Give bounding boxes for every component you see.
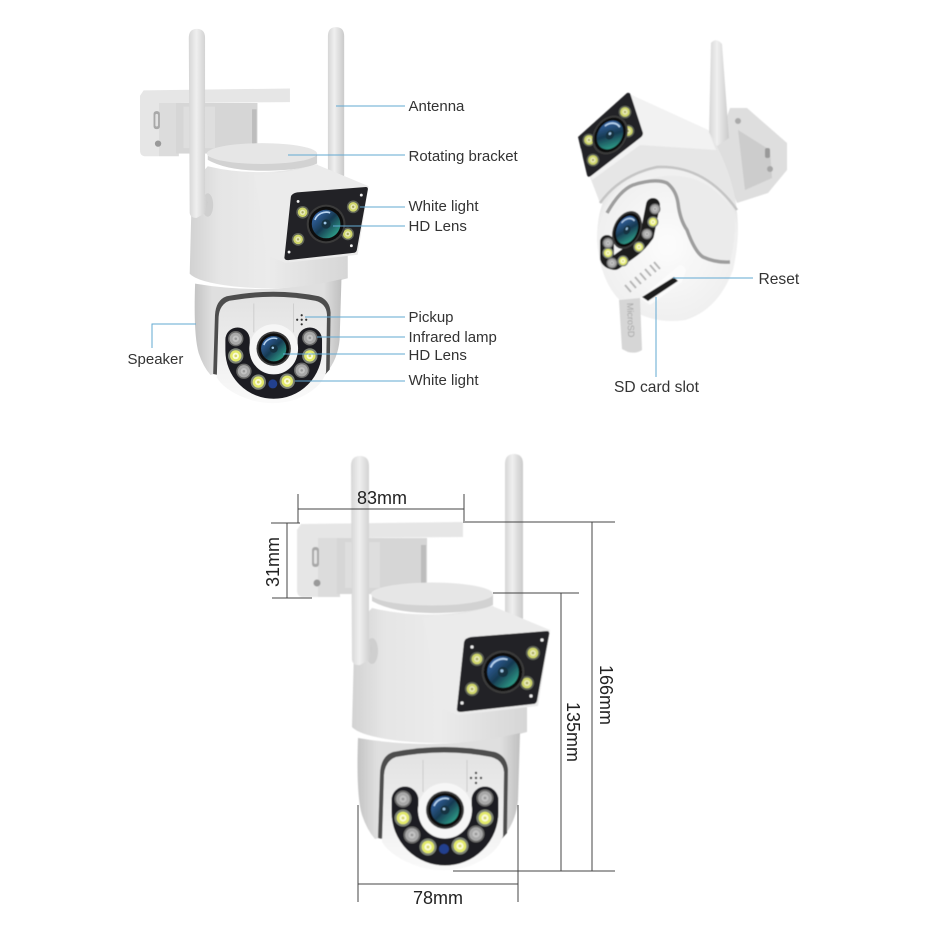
rear three-quarter camera photo [578, 40, 787, 353]
callout: Pickup: Pickup [408, 309, 454, 326]
dimension: width 78mm [358, 805, 518, 908]
dimension: width 78mm: 78mm [413, 888, 463, 908]
callout: Rotating bracket: Rotating bracket [408, 148, 519, 165]
callout: White light upper: White light [408, 198, 479, 215]
dimension lines [263, 488, 616, 908]
dimension: height 135mm [493, 593, 583, 871]
dimension camera photo [297, 454, 550, 870]
callouts: front camera parts [128, 98, 519, 389]
dimension: bracket height 31mm [263, 523, 312, 598]
dimension: width 83mm: 83mm [357, 488, 407, 508]
dimension: height 166mm: 166mm [596, 665, 616, 725]
callout: Antenna: Antenna [408, 98, 465, 115]
callout: White light upper [360, 198, 479, 215]
callout: HD Lens lower: HD Lens [408, 347, 467, 364]
dimension: height 166mm [453, 522, 616, 871]
callout: HD Lens upper: HD Lens [408, 218, 467, 235]
callout: HD Lens upper [333, 218, 467, 235]
front camera photo with callouts [140, 27, 369, 403]
callout: Antenna [336, 98, 465, 115]
callout: Reset: Reset [758, 271, 800, 288]
callout: Speaker [128, 324, 196, 368]
callout: Infrared lamp: Infrared lamp [408, 329, 497, 346]
callout: Speaker: Speaker [128, 351, 183, 368]
callouts: rear camera [614, 271, 800, 396]
card label: MicroSD [625, 303, 636, 338]
callout: White light lower: White light [408, 372, 479, 389]
callout: SD card slot: SD card slot [614, 379, 700, 396]
dimension: width 83mm [298, 488, 464, 523]
dimension: bracket height 31mm: 31mm [263, 537, 283, 587]
dimension: height 135mm: 135mm [563, 702, 583, 762]
callout: SD card slot [614, 297, 700, 396]
callout: Reset [673, 271, 800, 288]
